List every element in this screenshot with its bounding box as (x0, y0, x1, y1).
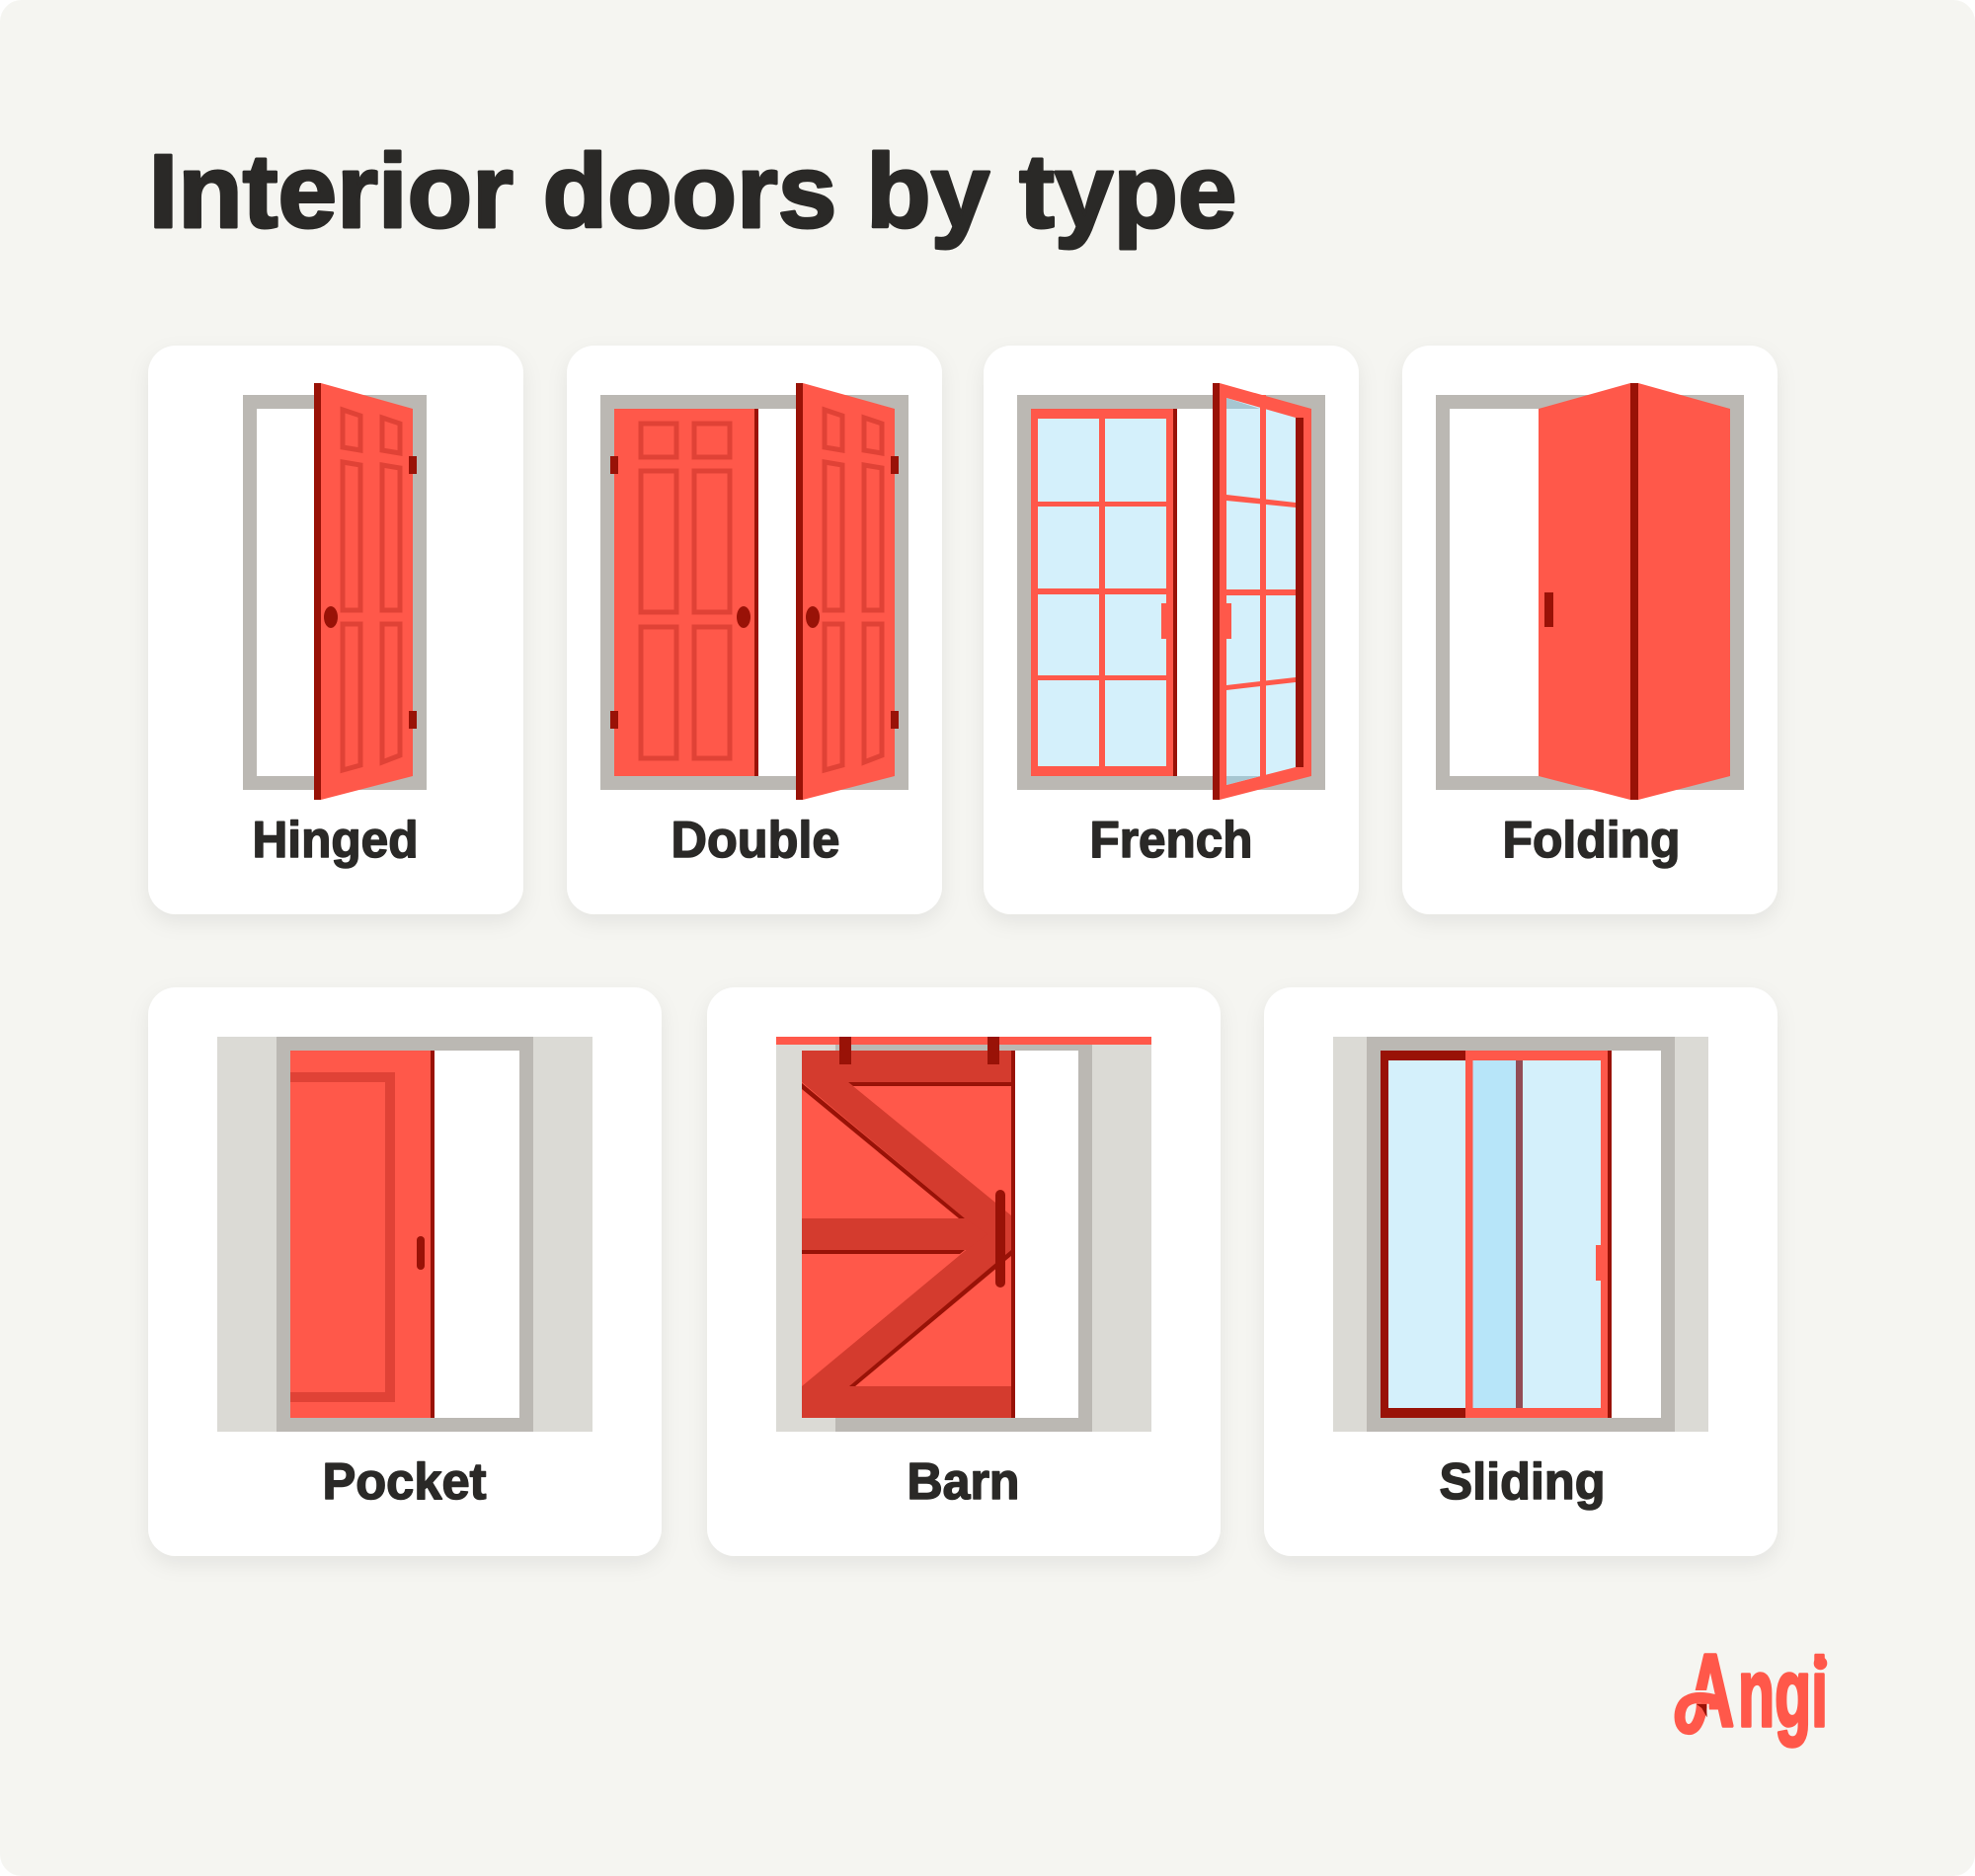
panel: double door (567, 346, 942, 914)
door frame (1017, 395, 1325, 790)
logo: Angi (1675, 1653, 1827, 1749)
logo: Angi: A (1687, 1634, 1734, 1749)
front panel (1465, 1051, 1612, 1418)
folding leaves (1539, 383, 1730, 800)
panel: barn door (707, 987, 1221, 1556)
label: Folding (1503, 812, 1681, 869)
panel: pocket door (148, 987, 662, 1556)
label: French (1090, 812, 1252, 869)
door frame (276, 1037, 533, 1432)
closed glass leaf (1031, 409, 1177, 776)
door frame (1436, 395, 1744, 790)
wall (217, 1037, 592, 1432)
sliding barn leaf (802, 1051, 1015, 1418)
door frame (1367, 1037, 1675, 1432)
sliding leaf (290, 1051, 434, 1418)
panel: french door (984, 346, 1359, 914)
open right leaf (796, 383, 899, 800)
rear panel (1381, 1051, 1469, 1418)
wall (776, 1037, 1151, 1432)
title: Interior doors by type (148, 133, 1236, 250)
panel: sliding door (1264, 987, 1778, 1556)
label: Barn (907, 1453, 1019, 1511)
open glass leaf (1213, 383, 1311, 800)
logo: Angi: ngi (1738, 1638, 1828, 1747)
rail and hangers (776, 1037, 1151, 1064)
door frame (835, 1037, 1092, 1432)
label: Sliding (1440, 1453, 1606, 1511)
door frame (243, 395, 427, 790)
label: Hinged (253, 812, 419, 869)
panel: folding door (1402, 346, 1778, 914)
door frame (600, 395, 908, 790)
label: Pocket (322, 1453, 486, 1511)
panel: hinged door (148, 346, 523, 914)
label: Double (672, 812, 839, 869)
open door leaf (314, 383, 417, 800)
wall (1333, 1037, 1708, 1432)
closed left leaf (610, 409, 758, 776)
